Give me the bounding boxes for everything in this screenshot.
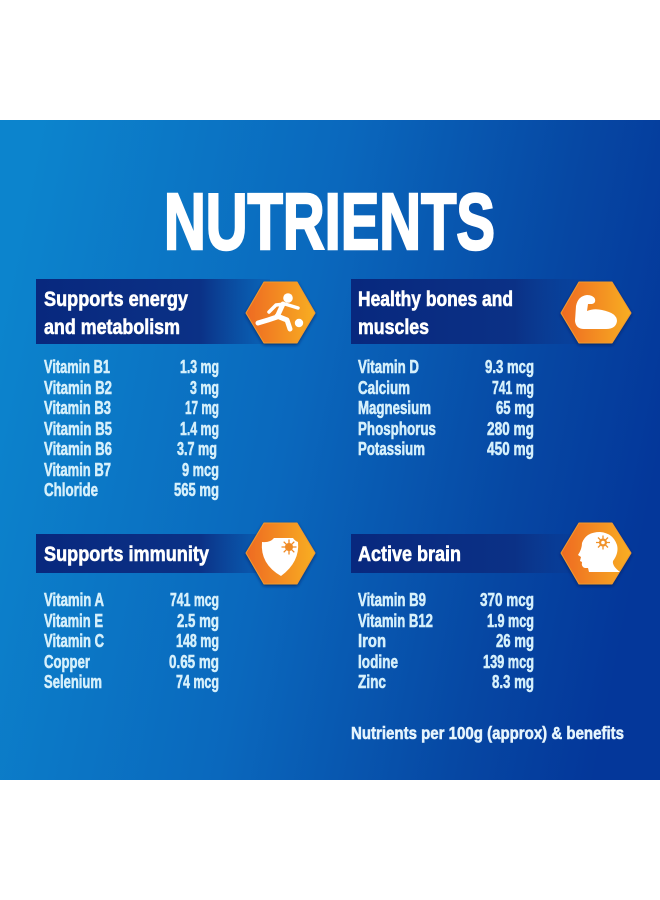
header band: Healthy bones and (358, 288, 513, 311)
nutrient list: 741 mcg (170, 590, 219, 610)
panel: supports energy and metabolism (36, 279, 315, 500)
nutrient list: 280 mg (487, 419, 534, 439)
nutrient list (358, 357, 534, 459)
nutrient list: 2.5 mg (177, 611, 219, 631)
nutrient list: Iron (358, 631, 386, 651)
header band: and metabolism (44, 316, 180, 339)
nutrient list: 565 mg (174, 480, 219, 500)
nutrient list: Magnesium (358, 398, 431, 418)
nutrient list: Vitamin B2 (44, 378, 112, 398)
nutrient list (358, 590, 534, 692)
nutrient list: 17 mg (185, 398, 219, 418)
nutrient list: Vitamin B3 (44, 398, 111, 418)
nutrient list: 450 mg (487, 439, 534, 459)
nutrient list: Vitamin C (44, 631, 104, 651)
nutrient list: Chloride (44, 480, 98, 500)
panel: blue background (0, 120, 660, 780)
icon: shield with sun (246, 523, 315, 584)
nutrient list: Vitamin D (358, 357, 419, 377)
nutrient list: Selenium (44, 672, 102, 692)
nutrient list: 74 mcg (176, 672, 219, 692)
header band (351, 534, 585, 573)
nutrient list: 370 mcg (480, 590, 534, 610)
icon: flexed arm (561, 282, 631, 343)
nutrient list: 148 mg (176, 631, 219, 651)
nutrient list: 8.3 mg (492, 672, 534, 692)
nutrient list: Vitamin B7 (44, 460, 111, 480)
nutrient list: 0.65 mg (169, 652, 219, 672)
header band (36, 534, 270, 573)
nutrient list (44, 357, 219, 500)
nutrient list: 1.9 mcg (487, 611, 534, 631)
nutrient list: Vitamin B6 (44, 439, 112, 459)
nutrient list: Vitamin B9 (358, 590, 426, 610)
nutrient list: Iodine (358, 652, 398, 672)
nutrient list: 1.4 mg (180, 419, 219, 439)
nutrient list: Vitamin B5 (44, 419, 112, 439)
nutrient list: Phosphorus (358, 419, 436, 439)
footnote: Nutrients per 100g (approx) & benefits (351, 723, 624, 743)
panel: healthy bones and muscles (351, 279, 631, 459)
nutrient list: 3.7 mg (177, 439, 217, 459)
panel: supports immunity (36, 523, 315, 692)
nutrient list: 1.3 mg (180, 357, 219, 377)
nutrient list: 139 mcg (483, 652, 534, 672)
nutrient list: 9 mcg (182, 460, 219, 480)
nutrient list: Potassium (358, 439, 425, 459)
header band: Supports energy (44, 288, 188, 311)
header band: Active brain (358, 543, 461, 566)
nutrient list: Vitamin A (44, 590, 104, 610)
nutrient list (44, 590, 219, 692)
icon: head with gear (561, 523, 631, 584)
nutrient list: 26 mg (496, 631, 534, 651)
panel: active brain (351, 523, 631, 692)
nutrient list: 3 mg (190, 378, 219, 398)
nutrient list: Zinc (358, 672, 386, 692)
nutrient list: Vitamin B12 (358, 611, 433, 631)
nutrient list: Calcium (358, 378, 410, 398)
header band (36, 279, 270, 344)
nutrient list: 741 mg (492, 378, 534, 398)
icon: runner kicking ball (246, 282, 315, 343)
header band (351, 279, 585, 344)
nutrient list: Copper (44, 652, 90, 672)
nutrient list: Vitamin E (44, 611, 103, 631)
header band: muscles (358, 316, 429, 339)
title: NUTRIENTS (164, 177, 495, 266)
nutrient list: 65 mg (496, 398, 534, 418)
nutrient list: 9.3 mcg (485, 357, 534, 377)
header band: Supports immunity (44, 543, 209, 566)
nutrient list: Vitamin B1 (44, 357, 110, 377)
